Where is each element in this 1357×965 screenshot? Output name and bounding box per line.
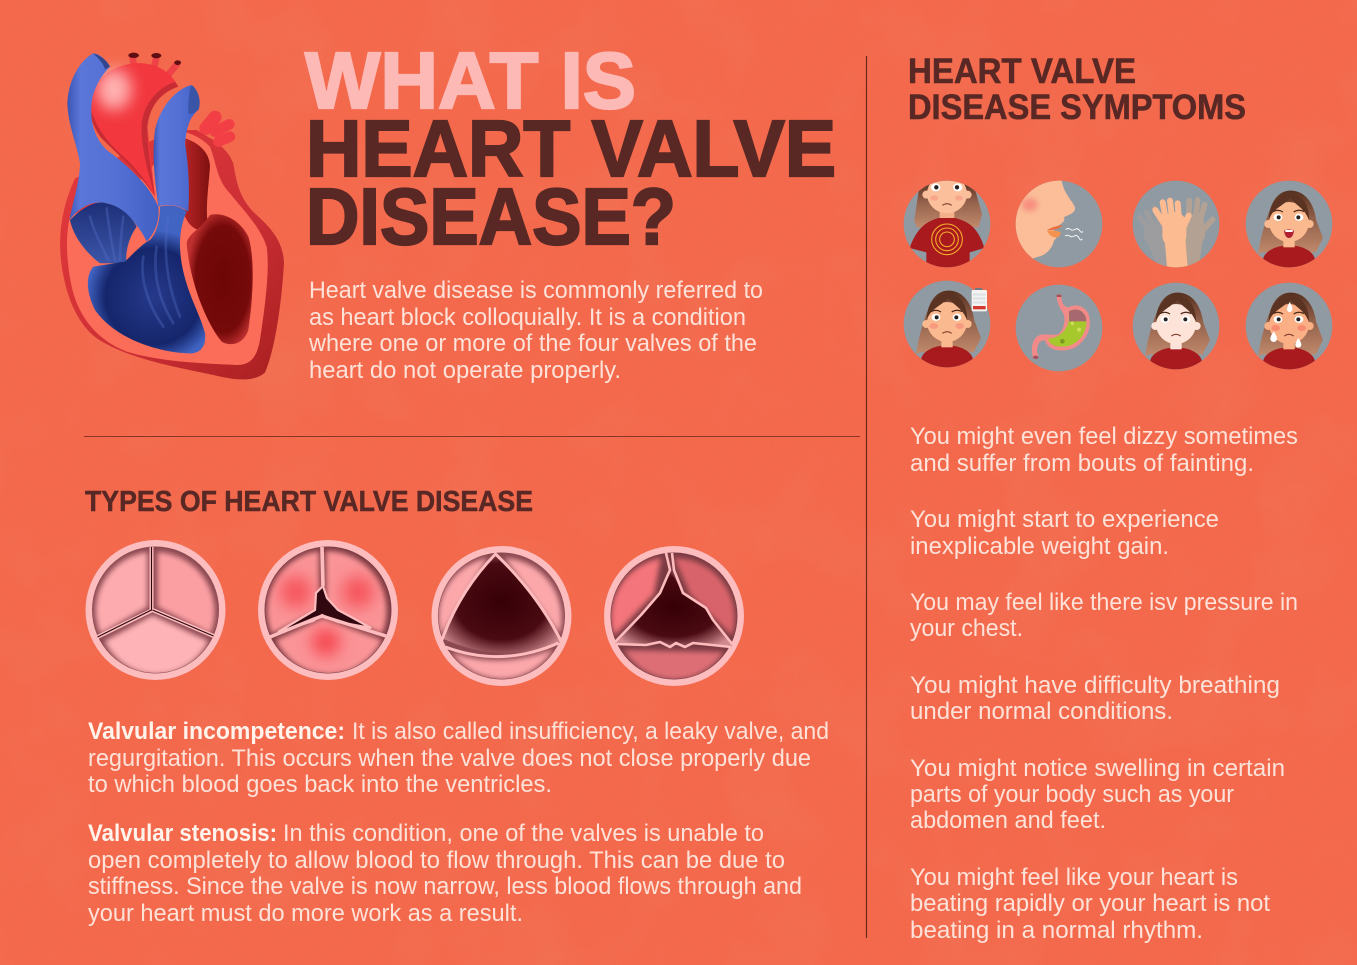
symptom: chest pressure: You may feel like there isv pressure in — [910, 589, 1298, 616]
title — [305, 36, 836, 261]
symptom: swelling — [910, 755, 1285, 834]
intro text: Heart valve disease is commonly referred to — [309, 277, 763, 304]
text: valvular stenosis — [88, 820, 802, 927]
icon: fatigue with low battery — [904, 281, 990, 376]
icon: sweating face — [1246, 283, 1332, 378]
heading: types: TYPES OF HEART VALVE DISEASE — [85, 486, 533, 518]
text: valvular stenosis: open completely to allow blood to flow through. This can be due to — [88, 847, 785, 874]
symptom: swelling: parts of your body such as your — [910, 781, 1234, 808]
text: valvular incompetence: regurgitation. This occurs when the valve does not close properly due — [88, 745, 811, 772]
symptom: irregular heartbeat: beating rapidly or your heart is not — [910, 890, 1270, 917]
text: valvular incompetence — [88, 718, 829, 798]
icon: numb hands — [1133, 181, 1219, 267]
text: valvular incompetence: to which blood goes back into the ventricles. — [88, 771, 552, 798]
icon: pale face — [1133, 283, 1219, 378]
icon: chest pain — [904, 175, 990, 267]
symptom: swelling: abdomen and feet. — [910, 807, 1106, 834]
icon: anxious face — [1246, 181, 1332, 276]
text: valvular incompetence: It is also called insufficiency, a leaky valve, and — [352, 718, 829, 745]
title: WHAT IS — [305, 36, 636, 125]
icon: heart cross-section — [60, 53, 284, 379]
valve 3: open triangle — [432, 546, 572, 686]
symptom: breathing: under normal conditions. — [910, 698, 1173, 725]
symptom: swelling: You might notice swelling in certain — [910, 755, 1285, 782]
heading: symptoms: HEART VALVE — [908, 52, 1136, 91]
valve 1: normal closed — [86, 540, 226, 680]
heading: symptoms: DISEASE SYMPTOMS — [908, 88, 1246, 127]
symptom: irregular heartbeat — [910, 864, 1270, 944]
intro text: as heart block colloquially. It is a condition — [309, 304, 746, 331]
symptom: dizziness: and suffer from bouts of fainting. — [910, 450, 1254, 477]
icon: shortness of breath — [1012, 177, 1102, 267]
symptom: breathing: You might have difficulty breathing — [910, 672, 1280, 699]
text: valvular stenosis: Valvular stenosis: — [88, 820, 277, 847]
symptom: dizziness: You might even feel dizzy sometimes — [910, 423, 1298, 450]
intro text: heart do not operate properly. — [309, 357, 621, 384]
valve 2: stenosis leaflets — [258, 540, 398, 680]
text: valvular stenosis: In this condition, one of the valves is unable to — [283, 820, 764, 847]
title: HEART VALVE — [306, 104, 836, 193]
symptom: weight gain: You might start to experience — [910, 506, 1219, 533]
intro text: where one or more of the four valves of the — [308, 330, 757, 357]
text: valvular incompetence: Valvular incompetence: — [88, 718, 345, 745]
intro text — [308, 277, 763, 384]
icon: stomach — [1016, 285, 1102, 371]
symptom: weight gain: inexplicable weight gain. — [910, 533, 1169, 560]
symptom: irregular heartbeat: You might feel like your heart is — [910, 864, 1238, 891]
symptom: chest pressure — [910, 589, 1298, 642]
text: valvular stenosis: stiffness. Since the valve is now narrow, less blood flows through and — [88, 873, 802, 900]
symptom: chest pressure: your chest. — [910, 615, 1023, 642]
heading: symptoms — [908, 52, 1246, 127]
symptom: dizziness — [910, 423, 1298, 477]
symptom: breathing — [910, 672, 1280, 725]
symptom: weight gain — [910, 506, 1219, 560]
symptom: irregular heartbeat: beating in a normal rhythm. — [910, 917, 1203, 944]
text: valvular stenosis: your heart must do more work as a result. — [88, 900, 523, 927]
valve 4: open irregular — [604, 546, 744, 686]
title: DISEASE? — [306, 172, 676, 261]
